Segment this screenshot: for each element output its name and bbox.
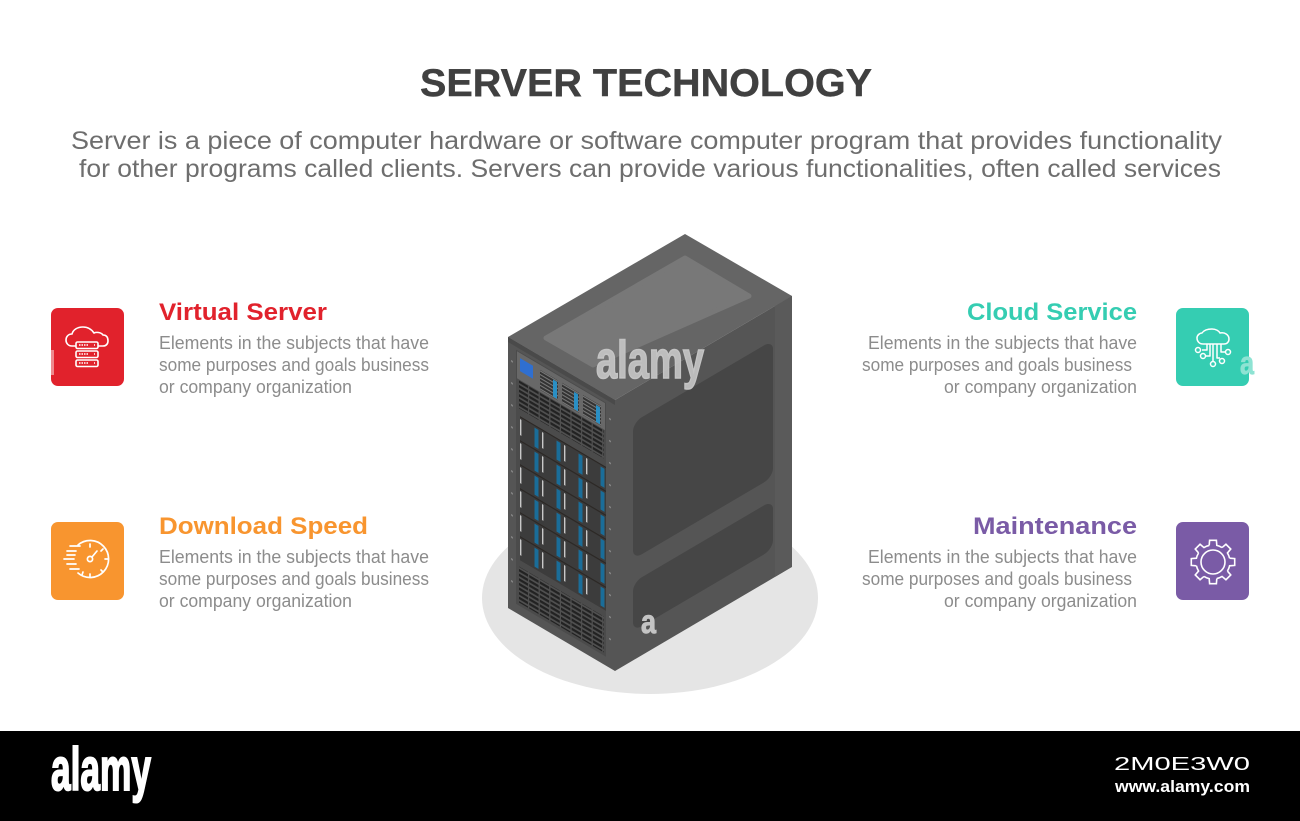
body text: some purposes and goals business — [159, 355, 429, 375]
item: Maintenance — [862, 513, 1249, 611]
body text: some purposes and goals business — [862, 355, 1132, 375]
icon: cloud server — [51, 308, 124, 386]
footer bar — [0, 731, 1300, 821]
description text — [71, 127, 1223, 183]
front face with drive bays — [508, 337, 615, 671]
rack rivets — [511, 360, 611, 641]
body text: or company organization — [159, 591, 352, 611]
body text: Elements in the subjects that have — [868, 333, 1137, 353]
icon: cloud network: a — [1240, 345, 1254, 381]
right side face — [615, 296, 792, 671]
body text: some purposes and goals business — [862, 569, 1132, 589]
body text: Elements in the subjects that have — [159, 547, 429, 567]
body text: or company organization — [159, 377, 352, 397]
website: www.alamy.com — [1114, 777, 1250, 796]
heading: Download Speed — [159, 513, 368, 540]
title: SERVER TECHNOLOGY — [420, 62, 872, 105]
watermark: a — [641, 603, 657, 640]
body text — [159, 547, 429, 611]
upper vent — [519, 380, 604, 459]
isometric server rack — [508, 234, 792, 671]
footer logo: alamy — [51, 736, 151, 803]
item: Cloud Service — [862, 299, 1254, 397]
item: Download Speed — [51, 513, 429, 611]
body text — [862, 547, 1137, 611]
icon: cloud network — [1176, 308, 1254, 386]
heading: Maintenance — [973, 513, 1137, 540]
body text — [862, 333, 1137, 397]
watermark: alamy — [596, 331, 704, 390]
heading: Cloud Service — [967, 299, 1137, 326]
description text: for other programs called clients. Servers can provide various functionalities, often called services — [79, 155, 1221, 183]
icon: gear — [1176, 522, 1249, 600]
icon: speedometer — [51, 522, 124, 600]
status panel — [517, 351, 605, 430]
image id: 2M0E3W0 — [1114, 754, 1250, 774]
server shadow ellipse — [482, 502, 818, 694]
heading: Virtual Server — [159, 299, 327, 326]
top face — [508, 234, 792, 404]
watermark — [596, 331, 704, 640]
body text: or company organization — [944, 591, 1137, 611]
body text — [159, 333, 429, 397]
lower vent — [519, 566, 604, 653]
body text: or company organization — [944, 377, 1137, 397]
body text: Elements in the subjects that have — [868, 547, 1137, 567]
body text: Elements in the subjects that have — [159, 333, 429, 353]
drive grid — [520, 416, 606, 611]
description text: Server is a piece of computer hardware or software computer program that provides functionality — [71, 127, 1223, 155]
body text: some purposes and goals business — [159, 569, 429, 589]
item: Virtual Server — [51, 299, 429, 397]
